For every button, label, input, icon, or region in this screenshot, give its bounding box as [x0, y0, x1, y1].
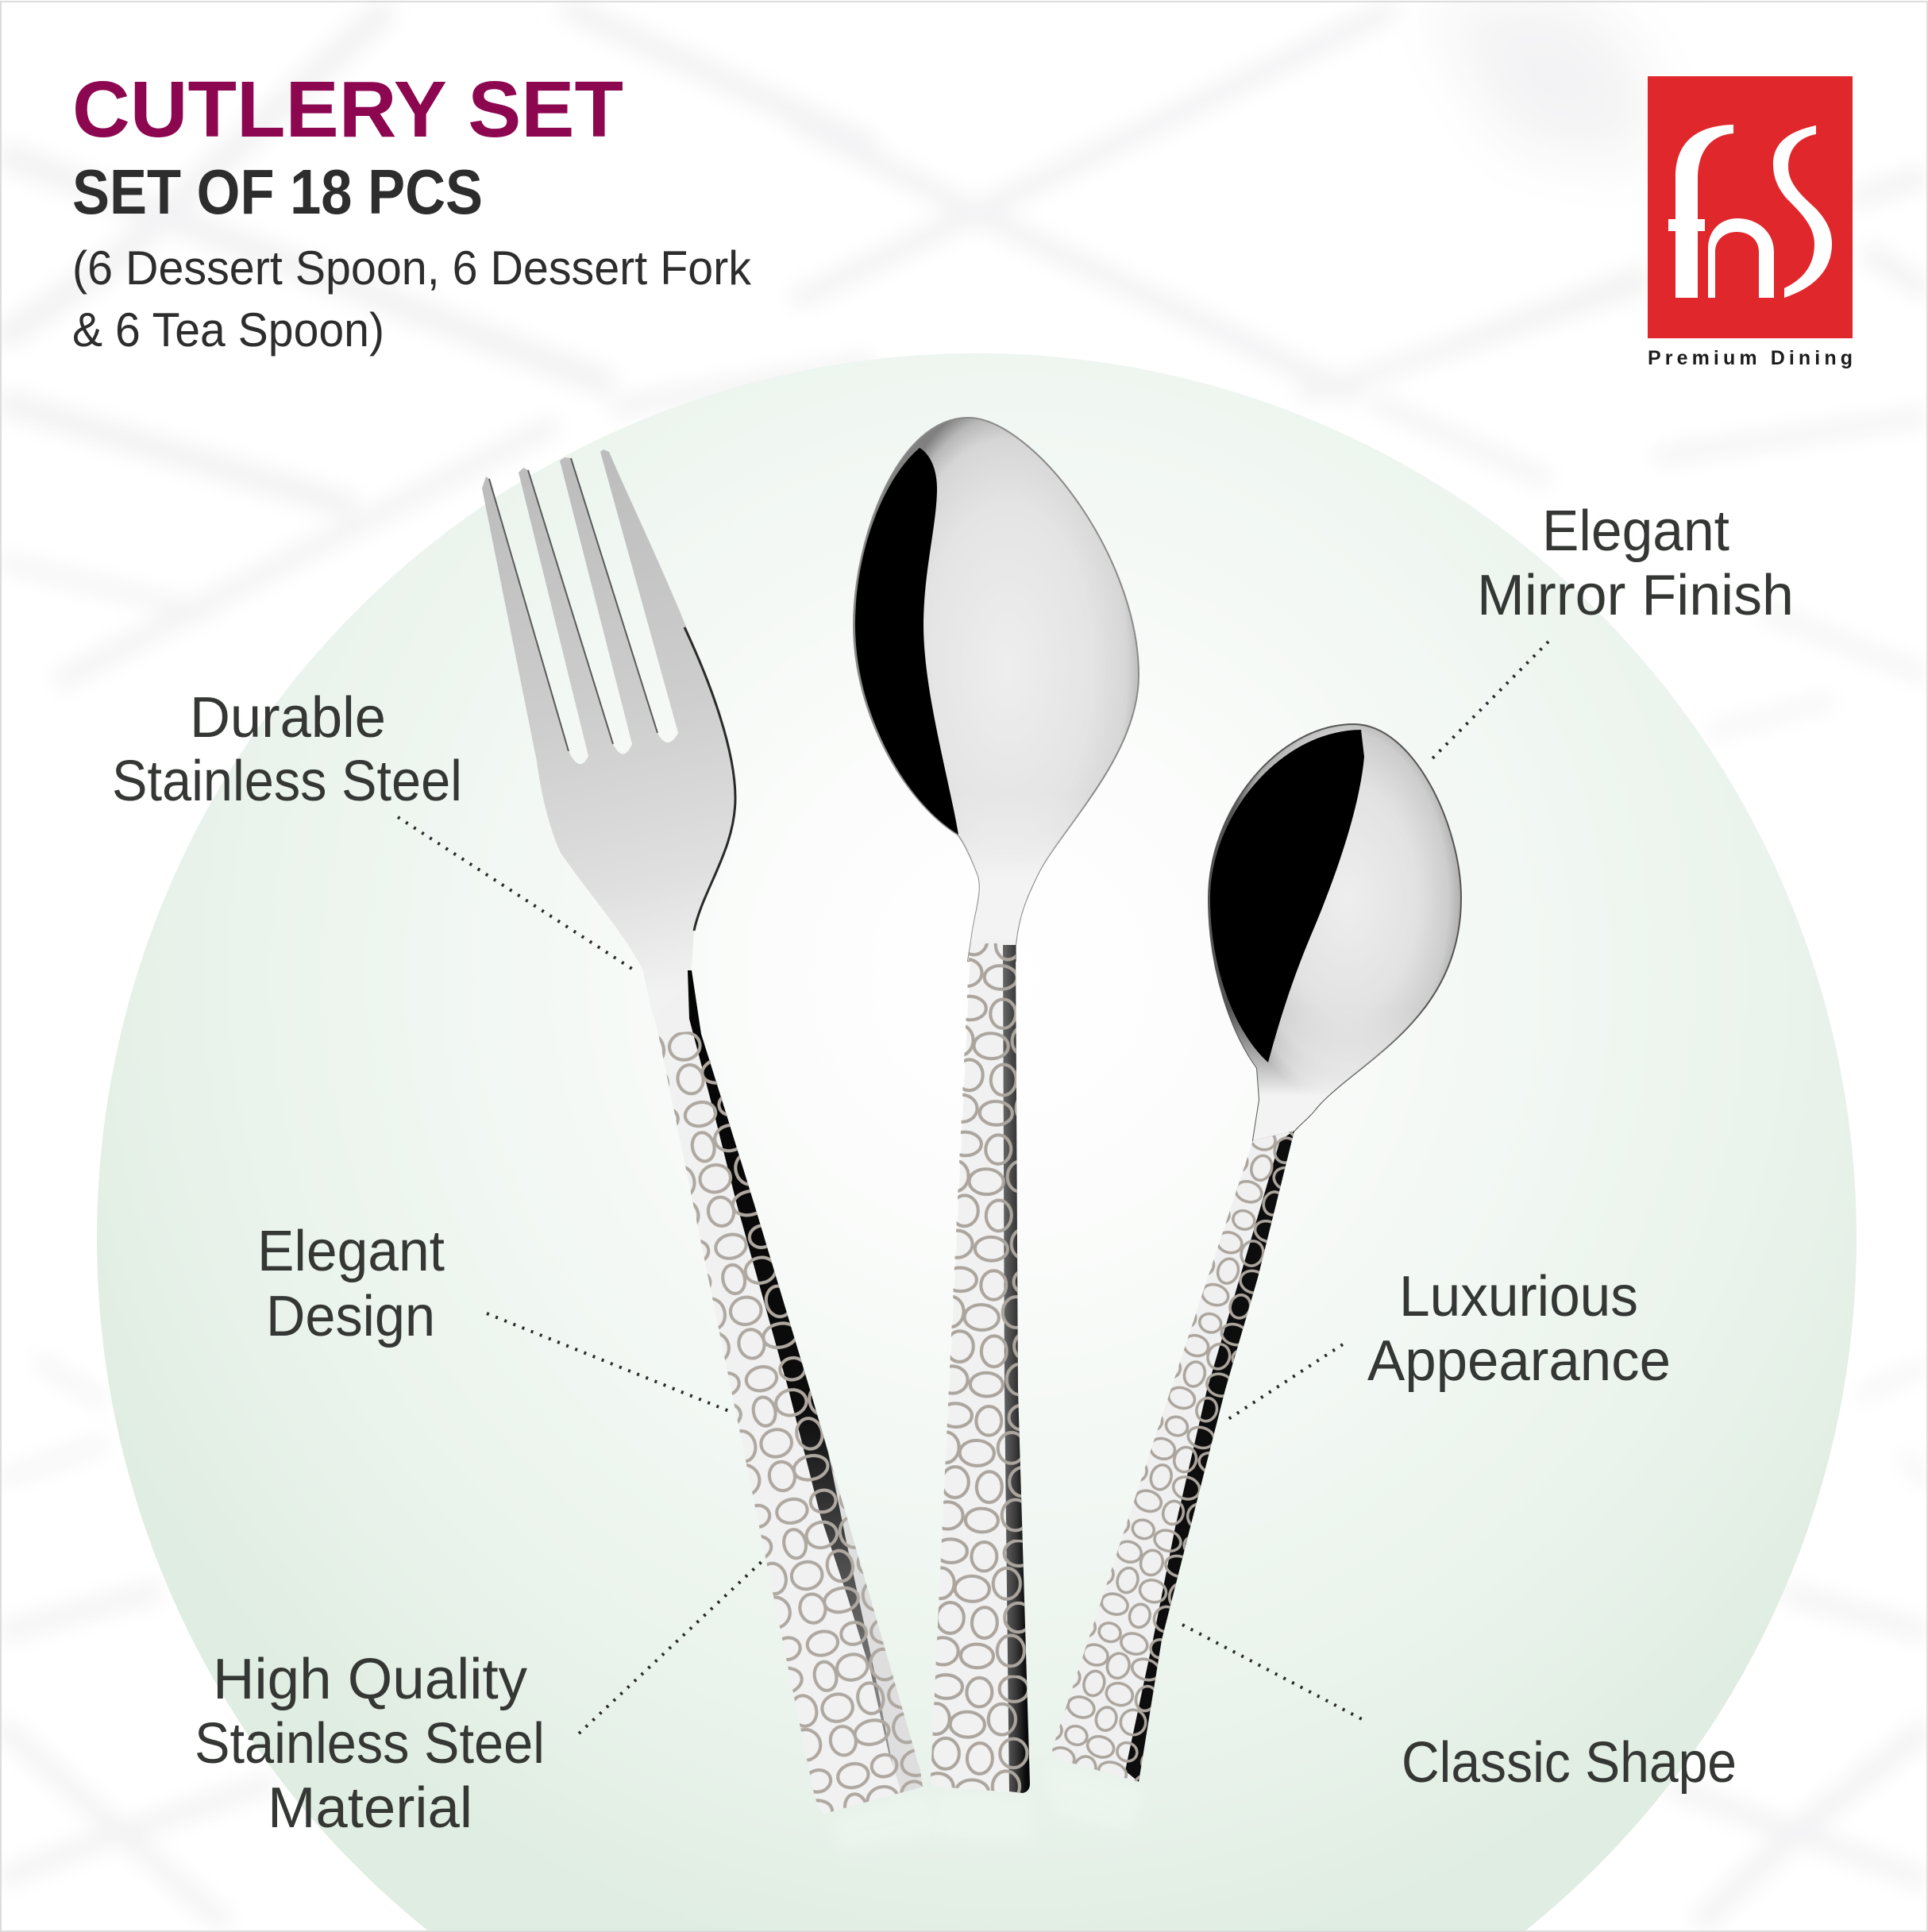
- logo tagline: Premium Dining: [1648, 347, 1853, 369]
- callout text: High Quality: [213, 1648, 527, 1711]
- leader line: [487, 1313, 733, 1413]
- callout text: Luxurious: [1399, 1265, 1638, 1328]
- callout text line 3: Material: [268, 1776, 472, 1840]
- callout text: Durable: [190, 686, 386, 750]
- callout text line 2: Appearance: [1367, 1329, 1671, 1393]
- fork head and tines: [482, 449, 735, 1016]
- callout: Elegant Design: [257, 1220, 733, 1413]
- callout: High Quality Stainless Steel Material: [195, 1560, 764, 1840]
- large spoon black reflection: [855, 448, 958, 835]
- large spoon bowl: [854, 418, 1139, 961]
- callout text: Elegant: [257, 1220, 445, 1283]
- callout: Elegant Mirror Finish: [1429, 499, 1794, 762]
- callout text: Elegant: [1542, 499, 1729, 563]
- fork tine dark edges: [489, 458, 657, 751]
- large spoon handle dark bevel: [1003, 945, 1030, 1793]
- logo: fnS Premium Dining: [1648, 76, 1853, 369]
- soft grey wedge behind logo: [1429, 0, 1648, 167]
- callout text line 2: Stainless Steel: [195, 1712, 545, 1776]
- description line 2: & 6 Tea Spoon): [72, 303, 384, 357]
- large spoon pebble pattern: [931, 943, 1030, 1793]
- callout: Luxurious Appearance: [1228, 1265, 1671, 1419]
- callout text line 2: Stainless Steel: [112, 750, 462, 813]
- large dessert spoon: [854, 418, 1139, 1793]
- tea spoon pebble pattern: [1052, 1131, 1294, 1782]
- large spoon neck highlight: [854, 418, 1139, 961]
- fork head dark right edge: [684, 627, 735, 931]
- title block: [72, 65, 752, 357]
- fork handle pebble pattern: [658, 1031, 923, 1814]
- fork handle: [643, 971, 923, 1814]
- logo letter f: [1668, 125, 1733, 298]
- fork: [482, 449, 923, 1814]
- tea spoon handle: [1052, 1131, 1294, 1782]
- tea spoon handle dark bevel: [1125, 1131, 1294, 1782]
- callout: Classic Shape: [1182, 1625, 1737, 1795]
- tea spoon neck highlight: [1209, 724, 1461, 1140]
- large spoon handle: [931, 939, 1030, 1793]
- description line 1: (6 Dessert Spoon, 6 Dessert Fork: [72, 241, 752, 295]
- subheading: Set of 18 pcs: SET OF 18 PCS: [72, 156, 483, 227]
- tea spoon bowl: [1209, 724, 1461, 1140]
- logo letter S: [1773, 125, 1832, 298]
- fork handle dark bevel: [688, 970, 893, 1764]
- tea spoon black reflection: [1210, 730, 1364, 1062]
- leader line: [1182, 1625, 1363, 1720]
- callout text: Classic Shape: [1402, 1731, 1737, 1795]
- logo red square: [1648, 76, 1853, 338]
- logo letter n: [1708, 218, 1774, 298]
- callout text line 2: Design: [266, 1285, 435, 1348]
- small tea spoon: [1052, 724, 1461, 1782]
- leader line: [1228, 1344, 1343, 1419]
- callout text line 2: Mirror Finish: [1477, 564, 1794, 627]
- pale green disc: [97, 353, 1857, 1932]
- callout: Durable Stainless Steel: [112, 686, 634, 970]
- leader line: [579, 1560, 764, 1733]
- leader line: [398, 817, 634, 970]
- fork handle right facet: [828, 1452, 923, 1793]
- heading: Cutlery Set: CUTLERY SET: [72, 65, 623, 154]
- leader line: [1429, 642, 1548, 762]
- cutlery reflections: [826, 1767, 1143, 1854]
